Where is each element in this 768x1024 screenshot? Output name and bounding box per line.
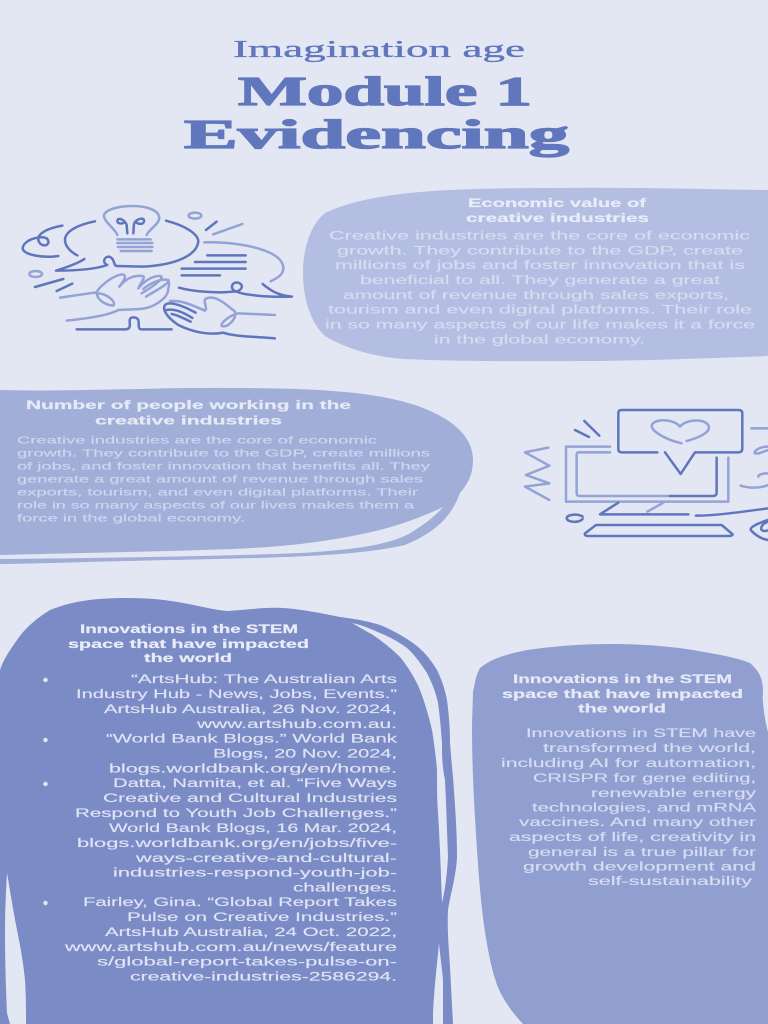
body text: Creative industries are the core of economic — [329, 230, 750, 242]
panel: number of people working — [0, 388, 473, 564]
body text: beneficial to all. They generate a great — [360, 275, 721, 287]
heading: creative industries — [466, 213, 649, 225]
heading — [466, 198, 649, 225]
body text: tourism and even digital platforms. Their role — [328, 304, 752, 316]
reference text: challenges. — [293, 882, 397, 894]
body text: generate a great amount of revenue through sales — [17, 474, 423, 486]
heading: Innovations in the STEM — [513, 674, 732, 686]
icon: light bulb, speech bubbles and hands — [23, 206, 292, 338]
body text: growth development and — [523, 862, 756, 874]
reference text: www.artshub.com.au/news/feature — [63, 942, 397, 954]
body text: Innovations in STEM have — [526, 728, 756, 740]
body text — [17, 436, 431, 524]
panel shape — [0, 598, 457, 1024]
heading: the world — [144, 653, 232, 665]
body text: vaccines. And many other — [519, 817, 756, 829]
heading: Innovations in the STEM — [80, 624, 298, 636]
reference text: s/global-report-takes-pulse-on- — [97, 956, 397, 968]
reference text — [63, 674, 397, 984]
reference text: Blogs, 20 Nov. 2024, — [213, 748, 397, 760]
panel: economic value of creative industries — [303, 188, 768, 361]
body text — [325, 230, 755, 346]
subtitle: Imagination age — [233, 37, 525, 63]
bullets — [43, 678, 48, 905]
reference text: ArtsHub Australia, 26 Nov. 2024, — [104, 704, 397, 716]
panel shape — [472, 644, 768, 1024]
body text: in the global economy. — [434, 334, 645, 346]
heading — [26, 400, 351, 428]
body text: growth. They contribute to the GDP, create — [337, 246, 743, 258]
body text: transformed the world, — [543, 743, 756, 755]
reference text: blogs.worldbank.org/en/jobs/five- — [77, 838, 397, 850]
body text: role in so many aspects of our lives makes them a — [17, 500, 414, 512]
heading: Economic value of — [468, 198, 646, 210]
reference text: Industry Hub - News, Jobs, Events.” — [76, 689, 397, 701]
gap in the upper right ribbon — [352, 623, 448, 903]
panel shape — [0, 388, 473, 564]
body text: CRISPR for gene editing, — [533, 773, 756, 785]
title block — [184, 37, 570, 157]
reference text: Pulse on Creative Industries.” — [127, 912, 397, 924]
body text: including AI for automation, — [501, 758, 756, 770]
heading: creative industries — [95, 416, 282, 428]
body text: technologies, and mRNA — [532, 802, 757, 814]
reference text: Fairley, Gina. “Global Report Takes — [83, 897, 397, 909]
reference text: blogs.worldbank.org/en/home. — [109, 764, 397, 776]
panel: references list — [0, 598, 457, 1024]
main title line 2: Evidencing — [184, 111, 570, 157]
heading: space that have impacted — [502, 689, 743, 701]
heading: the world — [578, 704, 666, 716]
body text: renewable energy — [591, 788, 756, 800]
body text: amount of revenue through sales exports, — [343, 290, 729, 302]
body text: millions of jobs and foster innovation that is — [335, 260, 745, 272]
body text — [501, 728, 757, 888]
reference text: “World Bank Blogs.” World Bank — [106, 734, 397, 746]
hand: upper — [60, 274, 172, 329]
body text: aspects of life, creativity in — [509, 832, 756, 844]
body text: exports, tourism, and even digital platforms. Their — [17, 488, 419, 498]
reference text: “ArtsHub: The Australian Arts — [131, 674, 397, 686]
reference text: creative-industries-2586294. — [130, 972, 397, 984]
reference text: Creative and Cultural Industries — [103, 793, 397, 805]
heading — [68, 624, 309, 665]
hand: lower — [164, 298, 275, 338]
body text: growth. They contribute to the GDP, create millions — [17, 448, 430, 460]
panel shape — [303, 188, 768, 361]
body text: force in the global economy. — [17, 514, 245, 524]
heading — [502, 674, 743, 716]
reference text: www.artshub.com.au. — [195, 719, 397, 731]
heading: Number of people working in the — [26, 400, 351, 412]
gap in the lower right ribbon — [433, 943, 443, 1024]
body text: of jobs, and foster innovation that benefits all. They — [17, 462, 431, 472]
reference text: World Bank Blogs, 16 Mar. 2024, — [109, 823, 397, 835]
reference text: ways-creative-and-cultural- — [134, 853, 397, 865]
reference text: Datta, Namita, et al. “Five Ways — [113, 778, 397, 790]
reference text: industries-respond-youth-job- — [113, 868, 397, 880]
icon: computer with heart speech bubble — [525, 410, 768, 540]
heading: space that have impacted — [68, 639, 309, 651]
gap on the left edge — [5, 873, 26, 1024]
reference text: ArtsHub Australia, 24 Oct. 2022, — [105, 927, 397, 939]
body text: self-sustainability — [588, 876, 752, 888]
body text: general is a true pillar for — [528, 847, 756, 859]
reference text: Respond to Youth Job Challenges.” — [75, 808, 397, 820]
body text: Creative industries are the core of economic — [17, 436, 377, 446]
panel: innovations in STEM — [472, 644, 768, 1024]
main title line 1: Module 1 — [238, 68, 532, 114]
body text: in so many aspects of our life makes it a force — [325, 320, 755, 332]
